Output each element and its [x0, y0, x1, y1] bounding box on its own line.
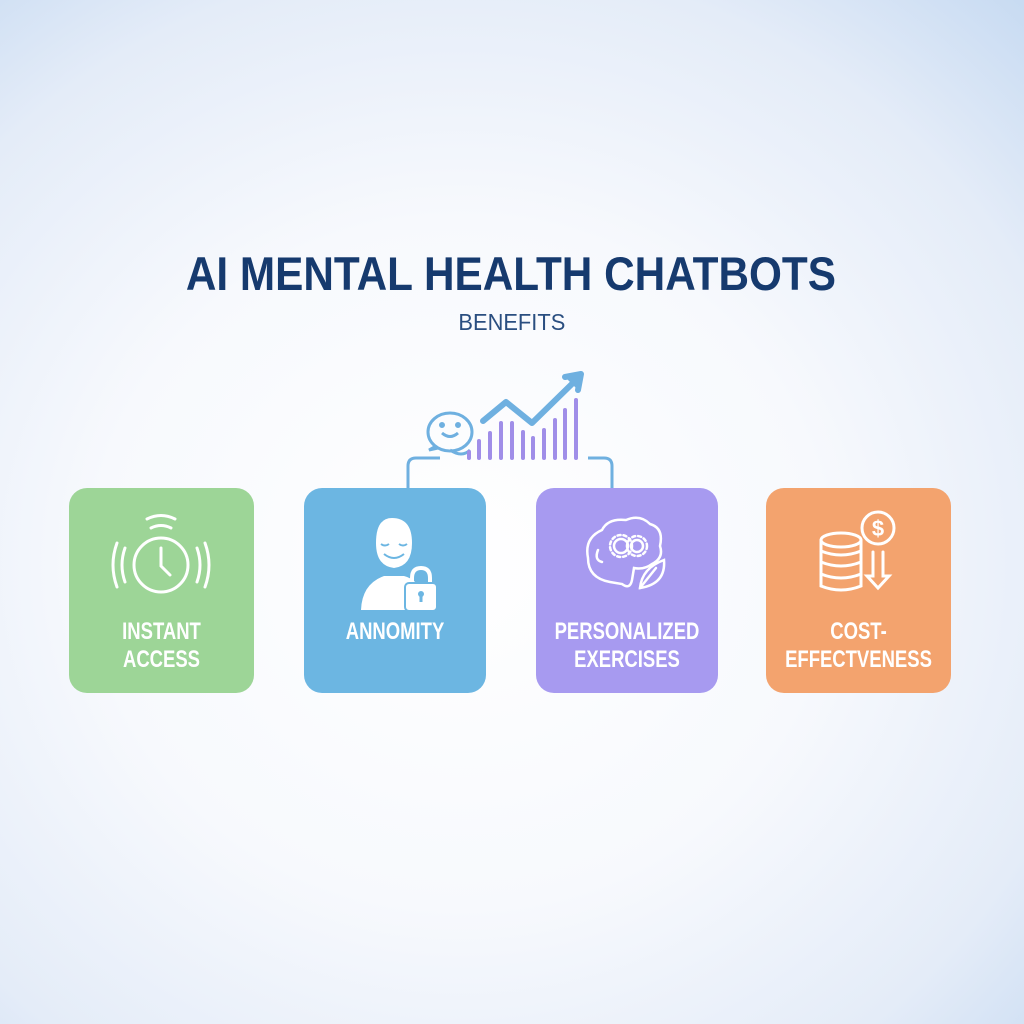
icon: stopwatch [112, 514, 210, 594]
label: INSTANT [122, 618, 201, 645]
label [785, 618, 932, 673]
icon: coins and dollar [820, 510, 896, 592]
label [555, 618, 699, 673]
title: AI MENTAL HEALTH CHATBOTS [186, 247, 836, 300]
icon: brain with gears and leaf [586, 516, 666, 590]
arrow: growth [483, 374, 581, 423]
panel: cost-effectiveness [766, 488, 951, 693]
label [122, 618, 201, 673]
icon: coins and dollar: $ [872, 516, 884, 541]
label: ACCESS [123, 646, 200, 673]
label: COST- [830, 618, 887, 645]
label: PERSONALIZED [555, 618, 699, 645]
panel: instant access [69, 488, 254, 693]
subtitle: BENEFITS [458, 309, 565, 335]
bar chart [469, 400, 576, 458]
label: EXERCISES [574, 646, 680, 673]
panel: personalized exercises [536, 488, 718, 693]
label: EFFECTVENESS [785, 646, 932, 673]
panel: anonymity [304, 488, 486, 693]
label: ANNOMITY [346, 618, 444, 645]
icon: mask with lock [361, 518, 436, 610]
icon: chat bubble [428, 413, 472, 454]
